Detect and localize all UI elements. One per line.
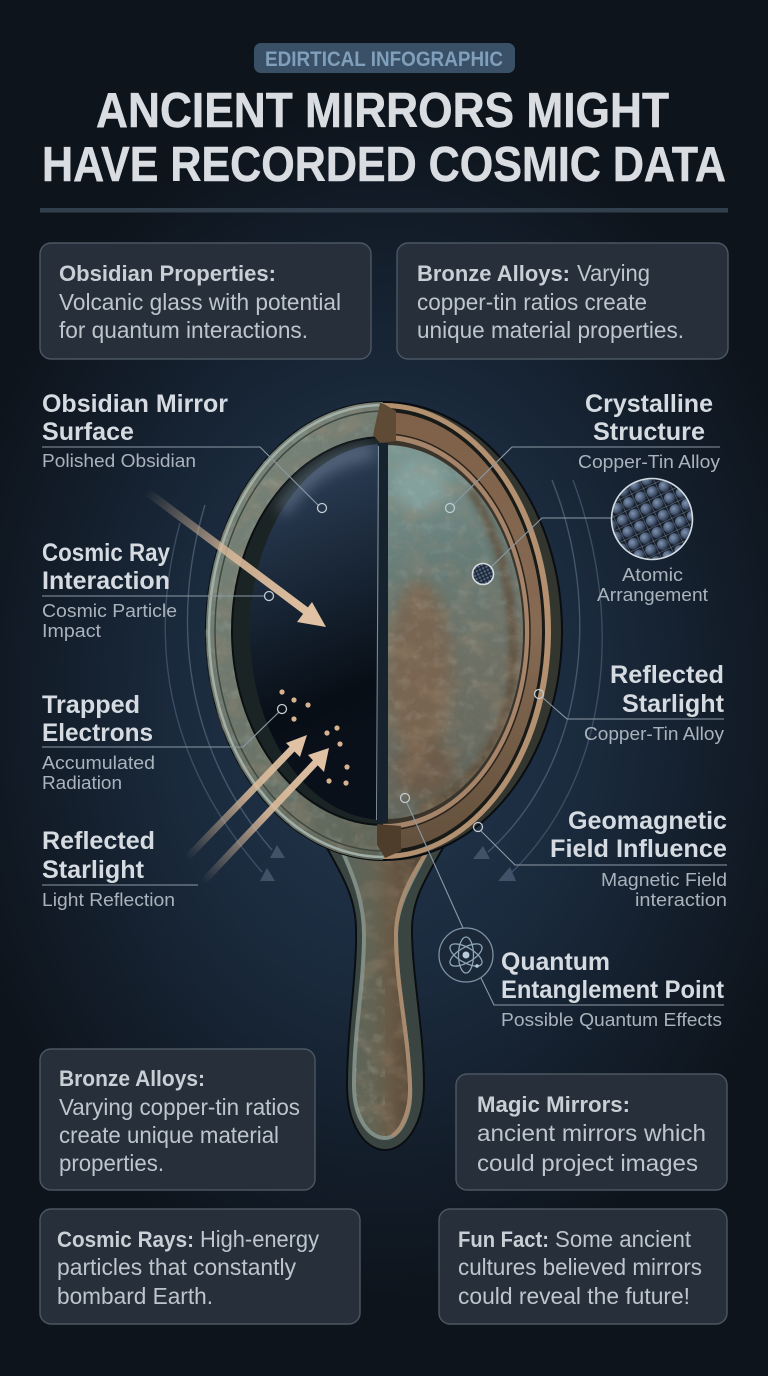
- right rim bands: [383, 403, 551, 859]
- label: geomagnetic field influence: Magnetic Field: [601, 869, 727, 890]
- rim joint bottom: [377, 824, 401, 858]
- panel: fun fact: could reveal the future!: [458, 1283, 690, 1309]
- panel: fun fact: cultures believed mirrors: [458, 1254, 702, 1280]
- panel: cosmic rays: [40, 1209, 360, 1324]
- panel: obsidian properties: [40, 243, 371, 359]
- label: quantum entanglement point: [400, 794, 725, 1030]
- panel: bronze alloys top: [397, 243, 728, 359]
- label: crystalline structure: Copper-Tin Alloy: [578, 451, 721, 472]
- label: trapped electrons: Trapped: [42, 691, 140, 719]
- panel: magic mirrors: [456, 1074, 727, 1190]
- panel: bronze alloys bottom: [40, 1049, 315, 1190]
- label: geomagnetic field influence: Field Influence: [550, 835, 727, 863]
- label: reflected starlight left: Light Reflection: [42, 889, 175, 910]
- callout: atomic arrangement: [472, 477, 708, 605]
- left rim patina: [205, 402, 383, 860]
- label: cosmic ray interaction: Interaction: [42, 567, 170, 595]
- title: [42, 84, 726, 192]
- panel: bronze alloys top: copper-tin ratios create: [417, 289, 647, 315]
- label: quantum entanglement point: Quantum: [501, 948, 610, 976]
- mirror illustration: [200, 395, 562, 1150]
- label: quantum entanglement point: Possible Quantum Effects: [501, 1009, 722, 1030]
- label: trapped electrons: Electrons: [42, 719, 153, 747]
- label: obsidian mirror surface: Obsidian Mirror: [42, 390, 228, 418]
- icon: atom: [439, 928, 493, 982]
- label: reflected starlight left: Reflected: [42, 827, 155, 855]
- icon: magnified atomic lattice: [610, 477, 694, 561]
- label: reflected starlight left: Starlight: [42, 856, 145, 884]
- label: cosmic ray interaction: Cosmic Ray: [42, 539, 170, 567]
- panel: magic mirrors: Magic Mirrors:: [477, 1092, 630, 1117]
- label: cosmic ray interaction: Cosmic Particle: [42, 600, 177, 621]
- panel: magic mirrors: ancient mirrors which: [477, 1120, 706, 1146]
- callout: atomic arrangement: Atomic: [622, 564, 683, 585]
- label: obsidian mirror surface: Surface: [42, 418, 134, 446]
- panel: fun fact: [439, 1209, 727, 1324]
- arrow: reflected starlight two: [203, 748, 329, 882]
- badge: editorial infographic: EDIRTICAL INFOGRAPHIC: [265, 48, 503, 71]
- label: trapped electrons: [42, 691, 286, 793]
- label: reflected starlight left: [42, 827, 198, 910]
- label: cosmic ray interaction: Impact: [42, 620, 101, 641]
- panel: bronze alloys top: Varying: [577, 260, 650, 286]
- label: trapped electrons: Radiation: [42, 772, 122, 793]
- label: reflected starlight right: [534, 661, 725, 744]
- label: trapped electrons: Accumulated: [42, 752, 155, 773]
- callout: atomic arrangement: Arrangement: [597, 584, 708, 605]
- label: crystalline structure: [446, 390, 721, 512]
- central seam: [376, 443, 388, 823]
- panel: cosmic rays: Cosmic Rays:: [57, 1227, 194, 1252]
- panel: bronze alloys top: unique material properties.: [417, 317, 684, 343]
- label: reflected starlight right: Copper-Tin Alloy: [584, 723, 725, 744]
- label: geomagnetic field influence: interaction: [635, 889, 727, 910]
- panel: obsidian properties: for quantum interactions.: [59, 317, 308, 343]
- panel: magic mirrors: could project images: [477, 1150, 698, 1176]
- label: quantum entanglement point: Entanglement Point: [501, 976, 725, 1004]
- panel: bronze alloys bottom: Bronze Alloys:: [59, 1066, 205, 1091]
- panel: obsidian properties: Obsidian Properties:: [59, 261, 276, 286]
- rim joint top: [373, 403, 396, 443]
- label: obsidian mirror surface: Polished Obsidian: [42, 450, 196, 471]
- label: crystalline structure: Structure: [593, 418, 705, 446]
- label: geomagnetic field influence: [474, 807, 727, 910]
- panel: fun fact: Some ancient: [555, 1226, 692, 1252]
- panel: fun fact: Fun Fact:: [458, 1227, 549, 1252]
- panel: bronze alloys bottom: create unique material: [59, 1122, 279, 1148]
- obsidian surface: [250, 439, 378, 820]
- label: geomagnetic field influence: Geomagnetic: [568, 807, 727, 835]
- bronze surface patina: [384, 440, 526, 825]
- panel: cosmic rays: particles that constantly: [57, 1254, 296, 1280]
- arrow: reflected starlight one: [187, 735, 307, 858]
- panel: bronze alloys bottom: properties.: [59, 1150, 164, 1176]
- panel: cosmic rays: bombard Earth.: [57, 1283, 213, 1309]
- label: crystalline structure: Crystalline: [585, 390, 713, 418]
- outer rim shadow: [206, 402, 562, 860]
- label: reflected starlight right: Reflected: [610, 661, 724, 689]
- label: cosmic ray interaction: [42, 539, 274, 641]
- title: ANCIENT MIRRORS MIGHT: [96, 84, 669, 138]
- panel: cosmic rays: High-energy: [200, 1226, 319, 1252]
- mirror handle: [326, 848, 444, 1151]
- icon: small crystal sample: [472, 564, 494, 584]
- arrow: cosmic ray: [146, 491, 326, 627]
- label: reflected starlight right: Starlight: [622, 690, 725, 718]
- field arcs and arrowheads: [165, 480, 602, 881]
- trapped electron dots: [279, 689, 350, 786]
- panel: obsidian properties: Volcanic glass with potential: [59, 289, 341, 315]
- label: obsidian mirror surface: [42, 390, 326, 512]
- panel: bronze alloys top: Bronze Alloys:: [417, 261, 570, 286]
- panel: bronze alloys bottom: Varying copper-tin ratios: [59, 1094, 300, 1120]
